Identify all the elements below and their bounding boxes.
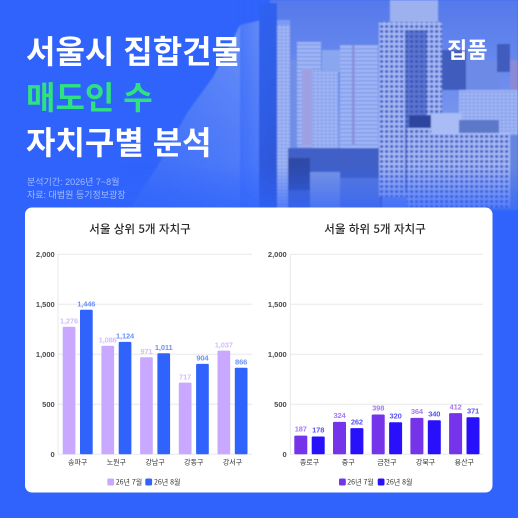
value labels: August: 371 — [467, 406, 479, 416]
category labels: 송파구 — [68, 458, 88, 468]
category labels: 강동구 — [184, 458, 204, 468]
category labels: 금천구 — [377, 458, 397, 468]
background photo: apartment skyline tinted blue — [120, 0, 518, 210]
value labels: July: 971 — [140, 347, 152, 356]
value labels: August: 1,011 — [155, 343, 173, 352]
y axis labels: 1,500 — [268, 300, 287, 309]
y axis labels — [36, 250, 55, 459]
legend: 26년 7월 — [116, 478, 142, 488]
y axis labels: 0 — [51, 450, 55, 459]
bars: July — [294, 413, 462, 454]
title — [26, 27, 241, 164]
source and period note: 자료: 대법원 등기정보광장 — [27, 189, 126, 200]
bars: July — [63, 327, 230, 454]
legend — [339, 478, 412, 488]
value labels: August: 320 — [390, 412, 402, 420]
value labels: July: 364 — [411, 407, 424, 416]
category labels: 용산구 — [455, 458, 475, 468]
category labels: 종로구 — [300, 458, 320, 468]
value labels: July — [60, 316, 233, 382]
bars: August — [80, 310, 248, 454]
category labels: 강남구 — [145, 458, 165, 468]
legend: 26년 7월 — [347, 478, 374, 488]
value labels: August: 340 — [428, 410, 440, 418]
value labels: July: 187 — [295, 424, 307, 434]
title: 매도인 수 — [26, 73, 153, 119]
value labels: August: 262 — [351, 418, 363, 426]
y axis labels: 1,500 — [36, 300, 55, 309]
value labels: August — [312, 406, 479, 434]
y axis labels: 1,000 — [268, 350, 287, 359]
value labels: August: 178 — [312, 426, 324, 434]
title: 서울시 집합건물 — [26, 27, 241, 73]
y axis labels: 2,000 — [268, 250, 287, 259]
value labels: August: 1,124 — [116, 332, 135, 341]
chart: top 5 districts — [36, 221, 252, 488]
y axis labels: 2,000 — [36, 250, 55, 259]
source and period note: 분석기간: 2026년 7~8월 — [27, 176, 119, 187]
category labels: 강북구 — [416, 458, 436, 468]
value labels: July: 324 — [333, 411, 347, 420]
value labels: July: 1,037 — [215, 340, 233, 350]
source and period note — [27, 176, 126, 200]
y axis labels: 500 — [274, 400, 287, 409]
value labels: August: 1,446 — [77, 300, 95, 308]
brand logo: 집품 — [447, 33, 487, 65]
panel: charts card — [25, 208, 492, 492]
chart title: bottom 5: 서울 하위 5개 자치구 — [324, 221, 426, 237]
value labels: August: 904 — [196, 354, 209, 363]
bars: August — [312, 417, 480, 454]
value labels: July — [295, 402, 462, 434]
title: 자치구별 분석 — [26, 118, 212, 164]
value labels: August — [77, 300, 247, 366]
category labels — [300, 458, 475, 468]
value labels: July: 412 — [450, 402, 462, 412]
y axis labels — [268, 250, 287, 459]
category labels: 중구 — [342, 458, 355, 468]
value labels: July: 1,086 — [99, 336, 117, 344]
legend — [107, 478, 180, 488]
value labels: July: 717 — [179, 372, 191, 382]
legend: 26년 8월 — [154, 478, 180, 488]
y axis labels: 1,000 — [36, 350, 55, 359]
value labels: July: 1,276 — [60, 316, 78, 326]
y axis labels: 500 — [42, 400, 55, 409]
chart title: top 5: 서울 상위 5개 자치구 — [89, 221, 191, 237]
chart: bottom 5 districts — [268, 221, 483, 488]
category labels — [68, 458, 243, 468]
value labels: July: 398 — [372, 404, 384, 412]
y axis labels: 0 — [283, 450, 287, 459]
legend: 26년 8월 — [386, 478, 412, 488]
category labels: 노원구 — [107, 458, 127, 468]
value labels: August: 866 — [235, 358, 247, 366]
category labels: 강서구 — [223, 458, 243, 468]
